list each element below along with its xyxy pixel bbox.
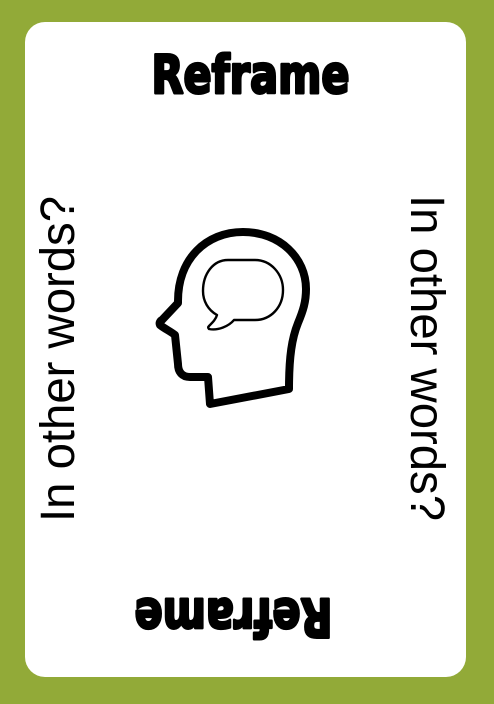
icon: head with speech bubble — [160, 232, 306, 404]
text: right prompt, rotated: In other words? — [400, 195, 453, 521]
heading: bottom title, upside down: Reframe — [134, 586, 332, 647]
icon: head outline — [160, 232, 306, 404]
icon: speech bubble — [203, 260, 283, 329]
text: left prompt, rotated: In other words? — [32, 196, 85, 522]
heading: top title: Reframe — [152, 45, 350, 106]
